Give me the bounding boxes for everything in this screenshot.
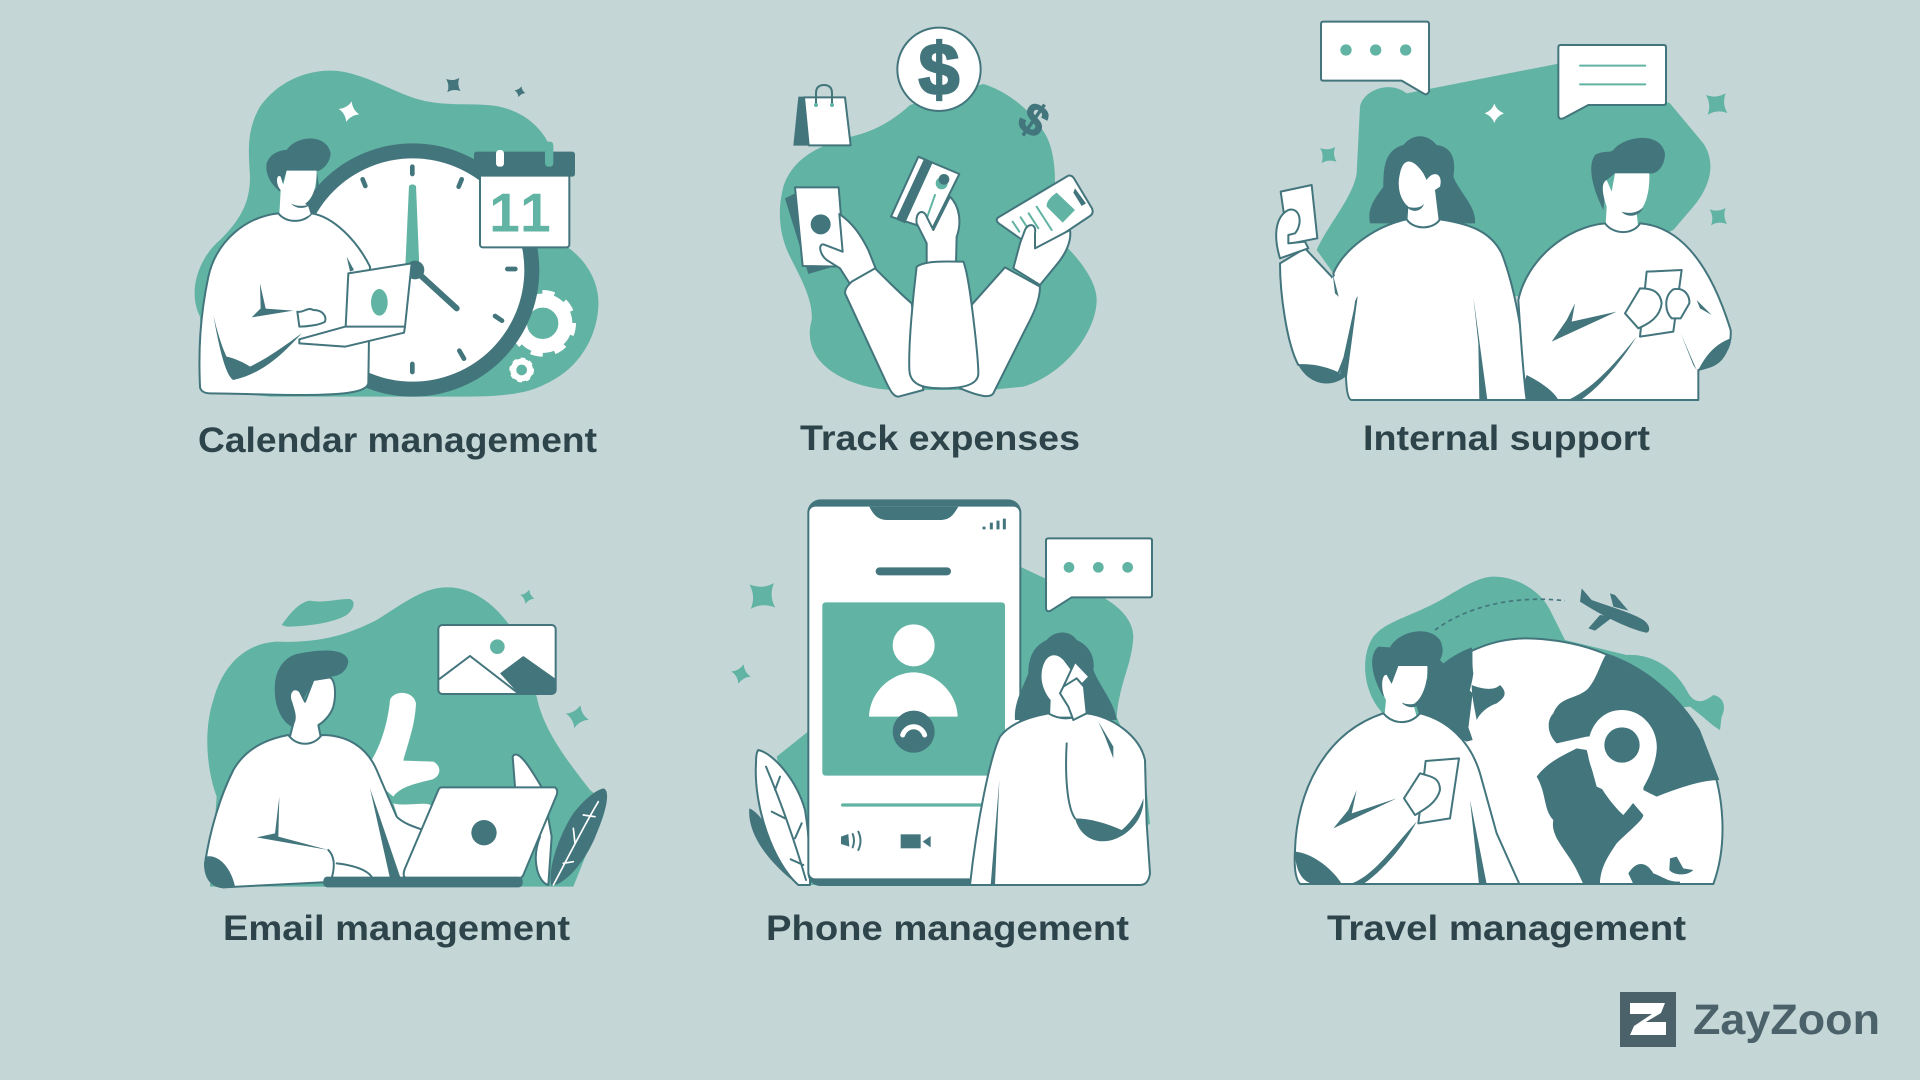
icon: stars [729,572,787,686]
wordmark: ZayZoon [1693,996,1880,1044]
leaves [513,754,607,886]
laptop [323,787,557,887]
speech bubble: lines [1558,45,1666,119]
background blob [780,84,1097,390]
icon: stars [1313,84,1736,233]
credit card [891,157,959,230]
calendar [474,142,575,247]
panel: email management [205,587,607,948]
icon: large gear [512,293,573,354]
icon: location pin [1588,710,1657,815]
left hand [820,214,876,284]
illustration: man with globe and plane [1295,577,1724,884]
woman [1276,136,1527,400]
picture card [438,625,556,694]
clock [286,143,539,397]
heading: Internal support [1363,419,1650,458]
phone [997,176,1093,249]
speech bubble: dots [1321,22,1429,94]
speech bubble [1046,538,1152,611]
icon: stars [336,72,527,125]
icon: small gear [510,359,533,381]
person [205,650,423,888]
icon: airplane [1580,588,1649,633]
background blob [1317,63,1710,297]
heading: Phone management [766,909,1129,948]
leaf [749,750,810,885]
cash in left hand [785,187,845,274]
calendar: 11 [489,182,554,244]
middle sleeve [909,261,978,388]
panel: phone management [729,499,1152,948]
icon: shopping bag [793,85,851,146]
woman on phone [970,632,1150,885]
illustration: phone call with woman [729,499,1152,886]
logo: ZayZoon [1620,992,1880,1047]
panel: track expenses [780,28,1097,458]
background blob [777,567,1150,885]
icon: dollar coin: $ [919,29,959,111]
heading: Calendar management [198,421,597,460]
panel: travel management [1295,577,1724,948]
icon: dollar coin [897,28,981,111]
panel: calendar management [195,71,598,460]
illustration: two colleagues with phones and speech bubbles [1276,22,1736,401]
heading: Email management [223,909,570,948]
right sleeve [960,267,1040,396]
illustration: man at laptop [205,587,607,888]
background blob [1365,577,1724,733]
man [1518,138,1731,401]
small blob [282,599,354,627]
icon: small dollar: $ [1009,92,1059,148]
right hand [1013,225,1070,285]
panel: internal support [1276,22,1736,458]
icon: stars [518,588,592,731]
person [199,139,370,395]
illustration: man with clock, calendar and laptop [195,71,598,397]
smartphone [807,499,1021,886]
left sleeve [845,268,923,397]
icon: Z mark [1620,992,1676,1047]
globe [1413,638,1723,884]
person [1295,631,1519,884]
background blob [195,71,598,397]
white plant [370,693,439,833]
middle hand [916,197,959,263]
heading: Travel management [1327,909,1686,948]
laptop [299,263,412,347]
background blob [207,587,607,887]
flight path [1435,599,1565,630]
heading: Track expenses [800,419,1080,458]
illustration: three hands holding money, card and phone [780,28,1097,397]
